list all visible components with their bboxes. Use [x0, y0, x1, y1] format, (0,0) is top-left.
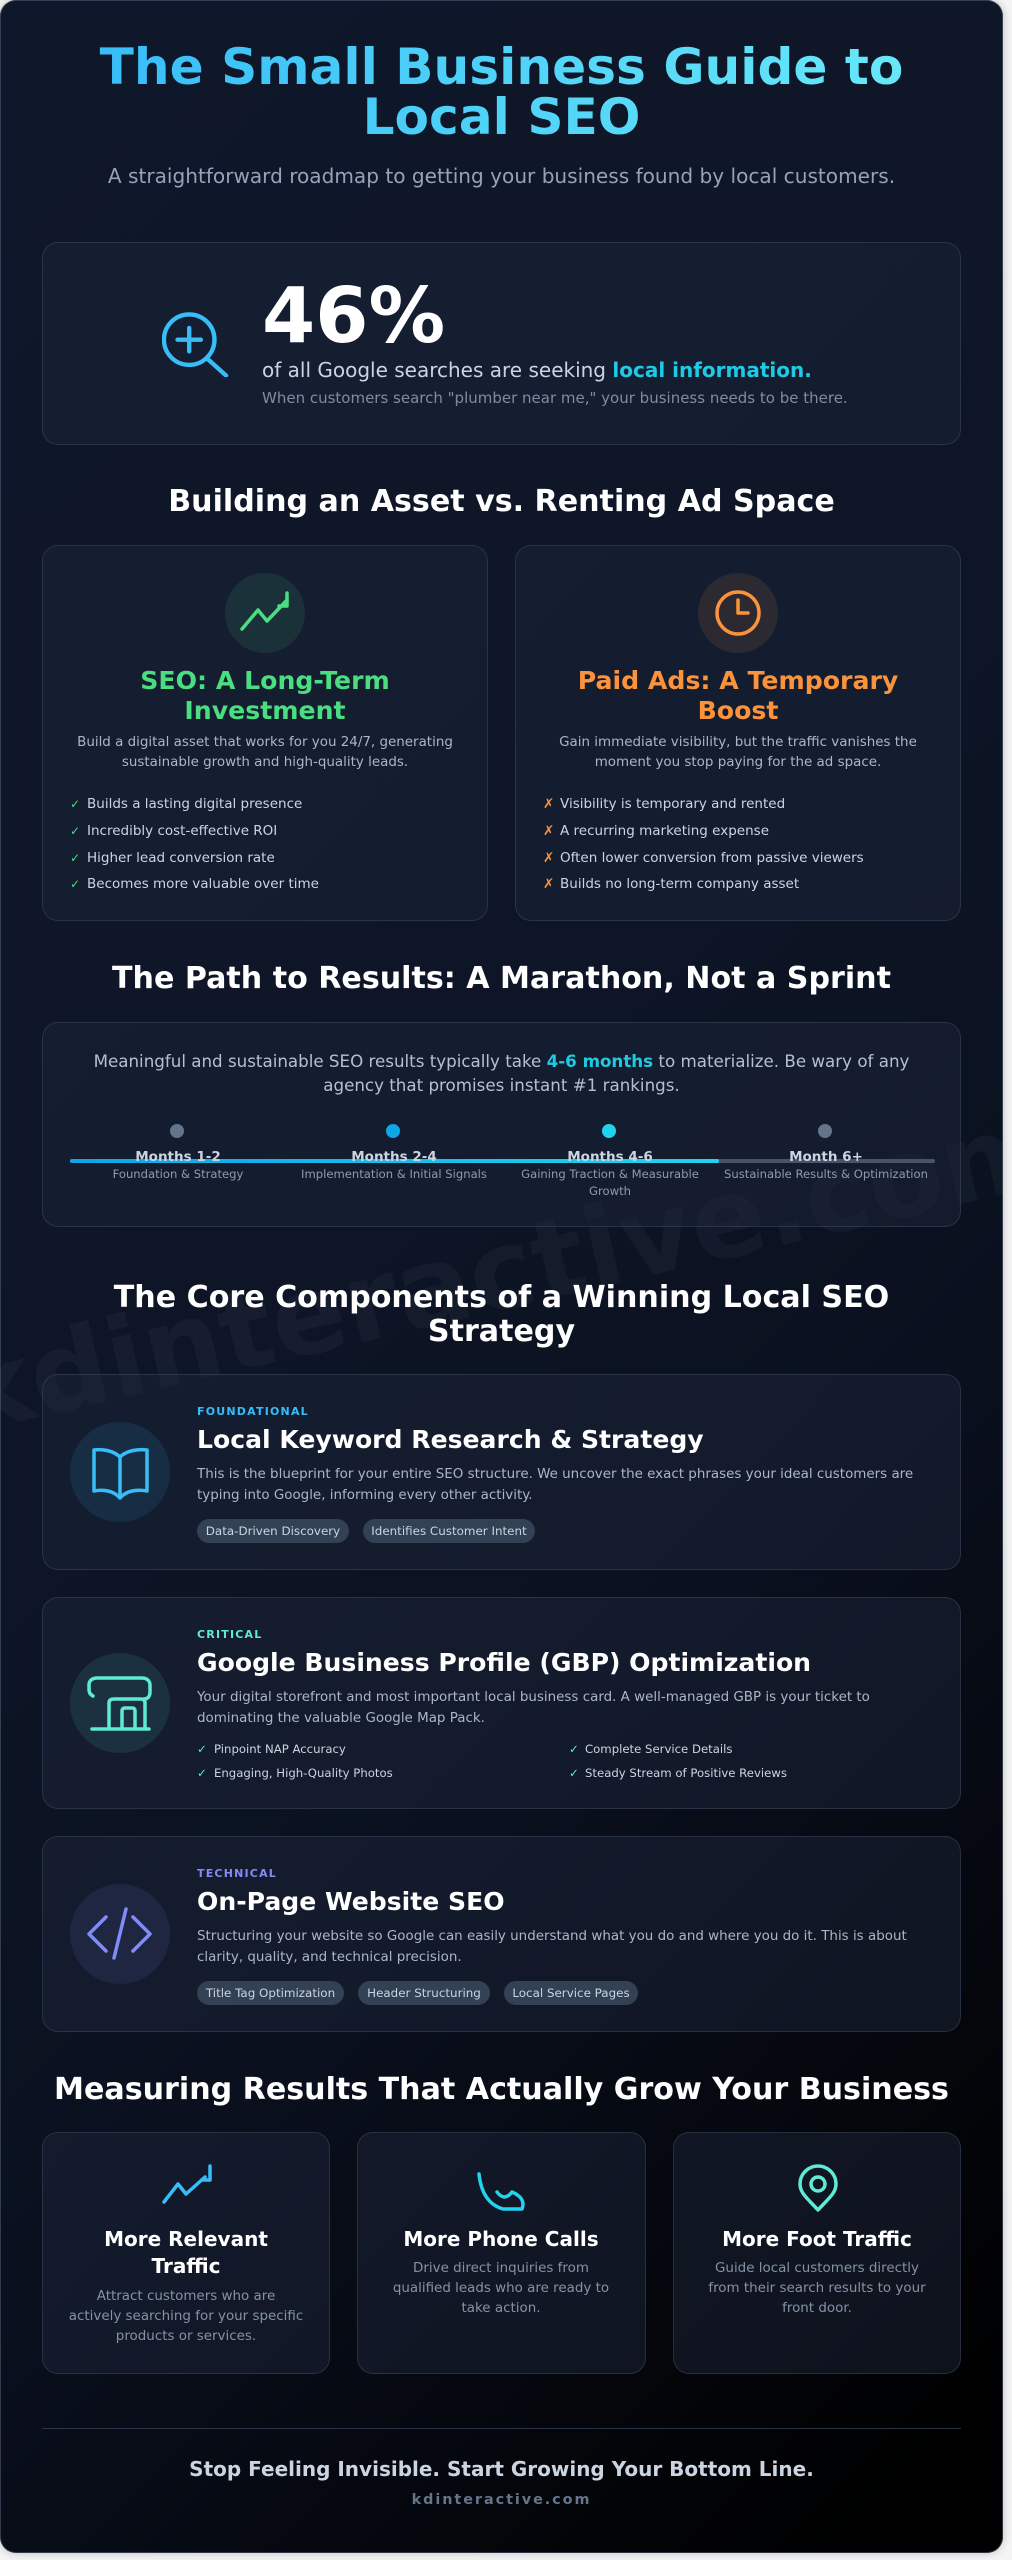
subtitle: A straightforward roadmap to getting your business found by local customers.: [108, 164, 895, 188]
SEO benefits list: Incredibly cost-effective ROI: [87, 823, 277, 839]
timeline intro text: Meaningful and sustainable SEO results typically take 4-6 months to materialize. Be wary of any: [94, 1051, 909, 1071]
paid ads drawbacks list: ✗: [543, 850, 554, 866]
icon: code brackets: [70, 1884, 170, 1984]
paid ads description: Gain immediate visibility, but the traffic vanishes the: [559, 735, 917, 750]
icon: storefront: [70, 1653, 170, 1753]
metric title: More Relevant: [104, 2227, 268, 2251]
step: months 2-4: [301, 1124, 487, 1181]
SEO benefits list: ✓: [70, 824, 80, 838]
panel: SEO: [42, 545, 488, 921]
component description: Structuring your website so Google can easily understand what you do and where you do it. This is about: [197, 1929, 907, 1944]
paid ads drawbacks list: Builds no long-term company asset: [560, 876, 799, 892]
tags: Title Tag Optimization: [206, 1986, 335, 2000]
component description: [197, 1690, 870, 1726]
heading: SEO investment: [140, 666, 390, 725]
icon: clock: [698, 573, 778, 653]
panel: timeline: [42, 1022, 961, 1227]
metric description: [393, 2261, 609, 2316]
component description: This is the blueprint for your entire SEO structure. We uncover the exact phrases your ideal customers are: [197, 1467, 913, 1482]
icon: phone: [477, 2172, 525, 2211]
panel: paid ads: [515, 545, 961, 921]
SEO description: sustainable growth and high-quality leads.: [122, 755, 408, 770]
component title: Local Keyword Research & Strategy: [197, 1425, 704, 1454]
feature checklist: ✓: [569, 1742, 579, 1756]
heading: path to results: The Path to Results: A Marathon, Not a Sprint: [112, 961, 891, 996]
tags: [197, 1519, 535, 1543]
tags: [197, 1981, 638, 2005]
tags: Local Service Pages: [512, 1986, 630, 2000]
tags: Header Structuring: [367, 1986, 481, 2000]
heading: SEO investment: SEO: A Long-Term: [140, 666, 390, 695]
metric description: Attract customers who are: [97, 2289, 275, 2304]
footer website: kdinteractive.com: [412, 2492, 591, 2508]
heading: core components: The Core Components of a Winning Local SEO: [114, 1280, 889, 1315]
feature checklist: Steady Stream of Positive Reviews: [585, 1766, 787, 1780]
tags: Identifies Customer Intent: [371, 1524, 527, 1538]
step: months 2-4: Months 2-4: [351, 1149, 437, 1165]
metric description: from their search results to your: [708, 2281, 926, 2296]
component description: Your digital storefront and most important local business card. A well-managed GBP is your ticket to: [197, 1690, 870, 1705]
heading: core components: [114, 1280, 889, 1349]
title: The Small Business Guide to: [100, 37, 903, 96]
panel: Google Business Profile: [42, 1597, 961, 1809]
tags: Data-Driven Discovery: [206, 1524, 340, 1538]
SEO benefits list: Builds a lasting digital presence: [87, 796, 302, 812]
heading: paid ads boost: Boost: [698, 696, 778, 725]
metric description: front door.: [782, 2301, 852, 2316]
SEO benefits list: [70, 796, 319, 892]
SEO description: [77, 735, 453, 770]
metric description: Drive direct inquiries from: [413, 2261, 589, 2276]
metric title: More Foot Traffic: [722, 2227, 912, 2251]
step: months 1-2: Months 1-2: [135, 1149, 221, 1165]
metric title: Traffic: [152, 2254, 220, 2278]
heading: asset vs ad space: Building an Asset vs. Renting Ad Space: [168, 484, 835, 519]
step: months 4-6: Growth: [589, 1184, 631, 1198]
metric description: [69, 2289, 303, 2344]
icon: growth chart: [225, 573, 305, 653]
timeline progress: [70, 1159, 719, 1163]
step: months 2-4: Implementation & Initial Signals: [301, 1167, 487, 1181]
panel: foot traffic: [673, 2132, 961, 2374]
paid ads drawbacks list: Often lower conversion from passive viewers: [560, 850, 864, 866]
panel: on-page SEO: [42, 1836, 961, 2032]
component description: typing into Google, informing every other activity.: [197, 1488, 533, 1502]
metric description: take action.: [462, 2301, 540, 2316]
SEO benefits list: Becomes more valuable over time: [87, 876, 319, 892]
metric description: [708, 2261, 926, 2316]
metric description: qualified leads who are ready to: [393, 2281, 609, 2296]
feature checklist: Complete Service Details: [585, 1742, 732, 1756]
panel: keyword research: [42, 1374, 961, 1570]
statistic number: 46%: [262, 272, 445, 361]
paid ads drawbacks list: ✗: [543, 876, 554, 892]
panel: hero statistic: [42, 242, 961, 445]
label: TECHNICAL: [197, 1867, 277, 1880]
title: [0, 42, 1003, 142]
step: months 1-2: Foundation & Strategy: [113, 1167, 243, 1181]
feature checklist: Engaging, High-Quality Photos: [214, 1766, 393, 1780]
metric title: [104, 2227, 268, 2278]
step: month 6+: Month 6+: [789, 1149, 863, 1165]
feature checklist: ✓: [569, 1766, 579, 1780]
heading: measuring results: Measuring Results That Actually Grow Your Business: [54, 2072, 949, 2107]
heading: paid ads boost: Paid Ads: A Temporary: [578, 666, 898, 695]
metric title: More Phone Calls: [403, 2227, 599, 2251]
panel: relevant traffic: [42, 2132, 330, 2374]
label: CRITICAL: [197, 1628, 262, 1641]
metric description: actively searching for your specific: [69, 2309, 303, 2324]
title: Local SEO: [363, 87, 640, 146]
icon: map pin: [798, 2164, 838, 2212]
footer call to action: Stop Feeling Invisible. Start Growing Your Bottom Line.: [189, 2457, 814, 2481]
step: months 1-2: [113, 1124, 243, 1181]
heading: SEO investment: Investment: [184, 696, 346, 725]
metric description: Guide local customers directly: [715, 2261, 919, 2276]
component description: [196, 1467, 913, 1502]
step: months 4-6: [521, 1124, 699, 1198]
SEO description: Build a digital asset that works for you 24/7, generating: [77, 735, 453, 750]
step: month 6+: Sustainable Results & Optimization: [724, 1167, 928, 1181]
step: months 4-6: Gaining Traction & Measurable: [521, 1167, 699, 1181]
feature checklist: ✓: [197, 1742, 207, 1756]
timeline track: [70, 1159, 935, 1163]
feature checklist: ✓: [197, 1766, 207, 1780]
statistic description: of all Google searches are seeking local information.: [262, 358, 812, 382]
metric description: products or services.: [116, 2329, 256, 2344]
paid ads drawbacks list: ✗: [543, 823, 554, 839]
paid ads drawbacks list: A recurring marketing expense: [560, 823, 769, 839]
paid ads drawbacks list: Visibility is temporary and rented: [560, 796, 785, 812]
SEO benefits list: ✓: [70, 797, 80, 811]
heading: paid ads boost: [578, 666, 898, 725]
timeline intro text: [94, 1051, 909, 1095]
panel: phone calls: [357, 2132, 646, 2374]
paid ads drawbacks list: [543, 796, 864, 892]
paid ads description: moment you stop paying for the ad space.: [595, 755, 881, 770]
component description: [197, 1929, 907, 1964]
SEO benefits list: Higher lead conversion rate: [87, 850, 275, 866]
statistic note: When customers search "plumber near me," your business needs to be there.: [262, 389, 848, 407]
timeline intro text: agency that promises instant #1 rankings.: [323, 1075, 680, 1095]
SEO benefits list: ✓: [70, 877, 80, 891]
component description: dominating the valuable Google Map Pack.: [197, 1710, 485, 1726]
feature checklist: Pinpoint NAP Accuracy: [214, 1742, 346, 1756]
component description: clarity, quality, and technical precision.: [197, 1950, 462, 1964]
icon: trending chart: [162, 2164, 212, 2204]
icon: open book: [70, 1422, 170, 1522]
feature checklist: [197, 1742, 787, 1780]
component title: Google Business Profile (GBP) Optimization: [197, 1648, 811, 1677]
paid ads description: [559, 735, 917, 770]
component title: On-Page Website SEO: [197, 1887, 505, 1916]
icon: magnifying glass: [162, 312, 228, 377]
heading: core components: Strategy: [428, 1314, 575, 1349]
paid ads drawbacks list: ✗: [543, 796, 554, 812]
step: months 4-6: Months 4-6: [567, 1149, 653, 1165]
SEO benefits list: ✓: [70, 851, 80, 865]
step: month 6+: [724, 1124, 928, 1181]
label: FOUNDATIONAL: [197, 1405, 309, 1418]
